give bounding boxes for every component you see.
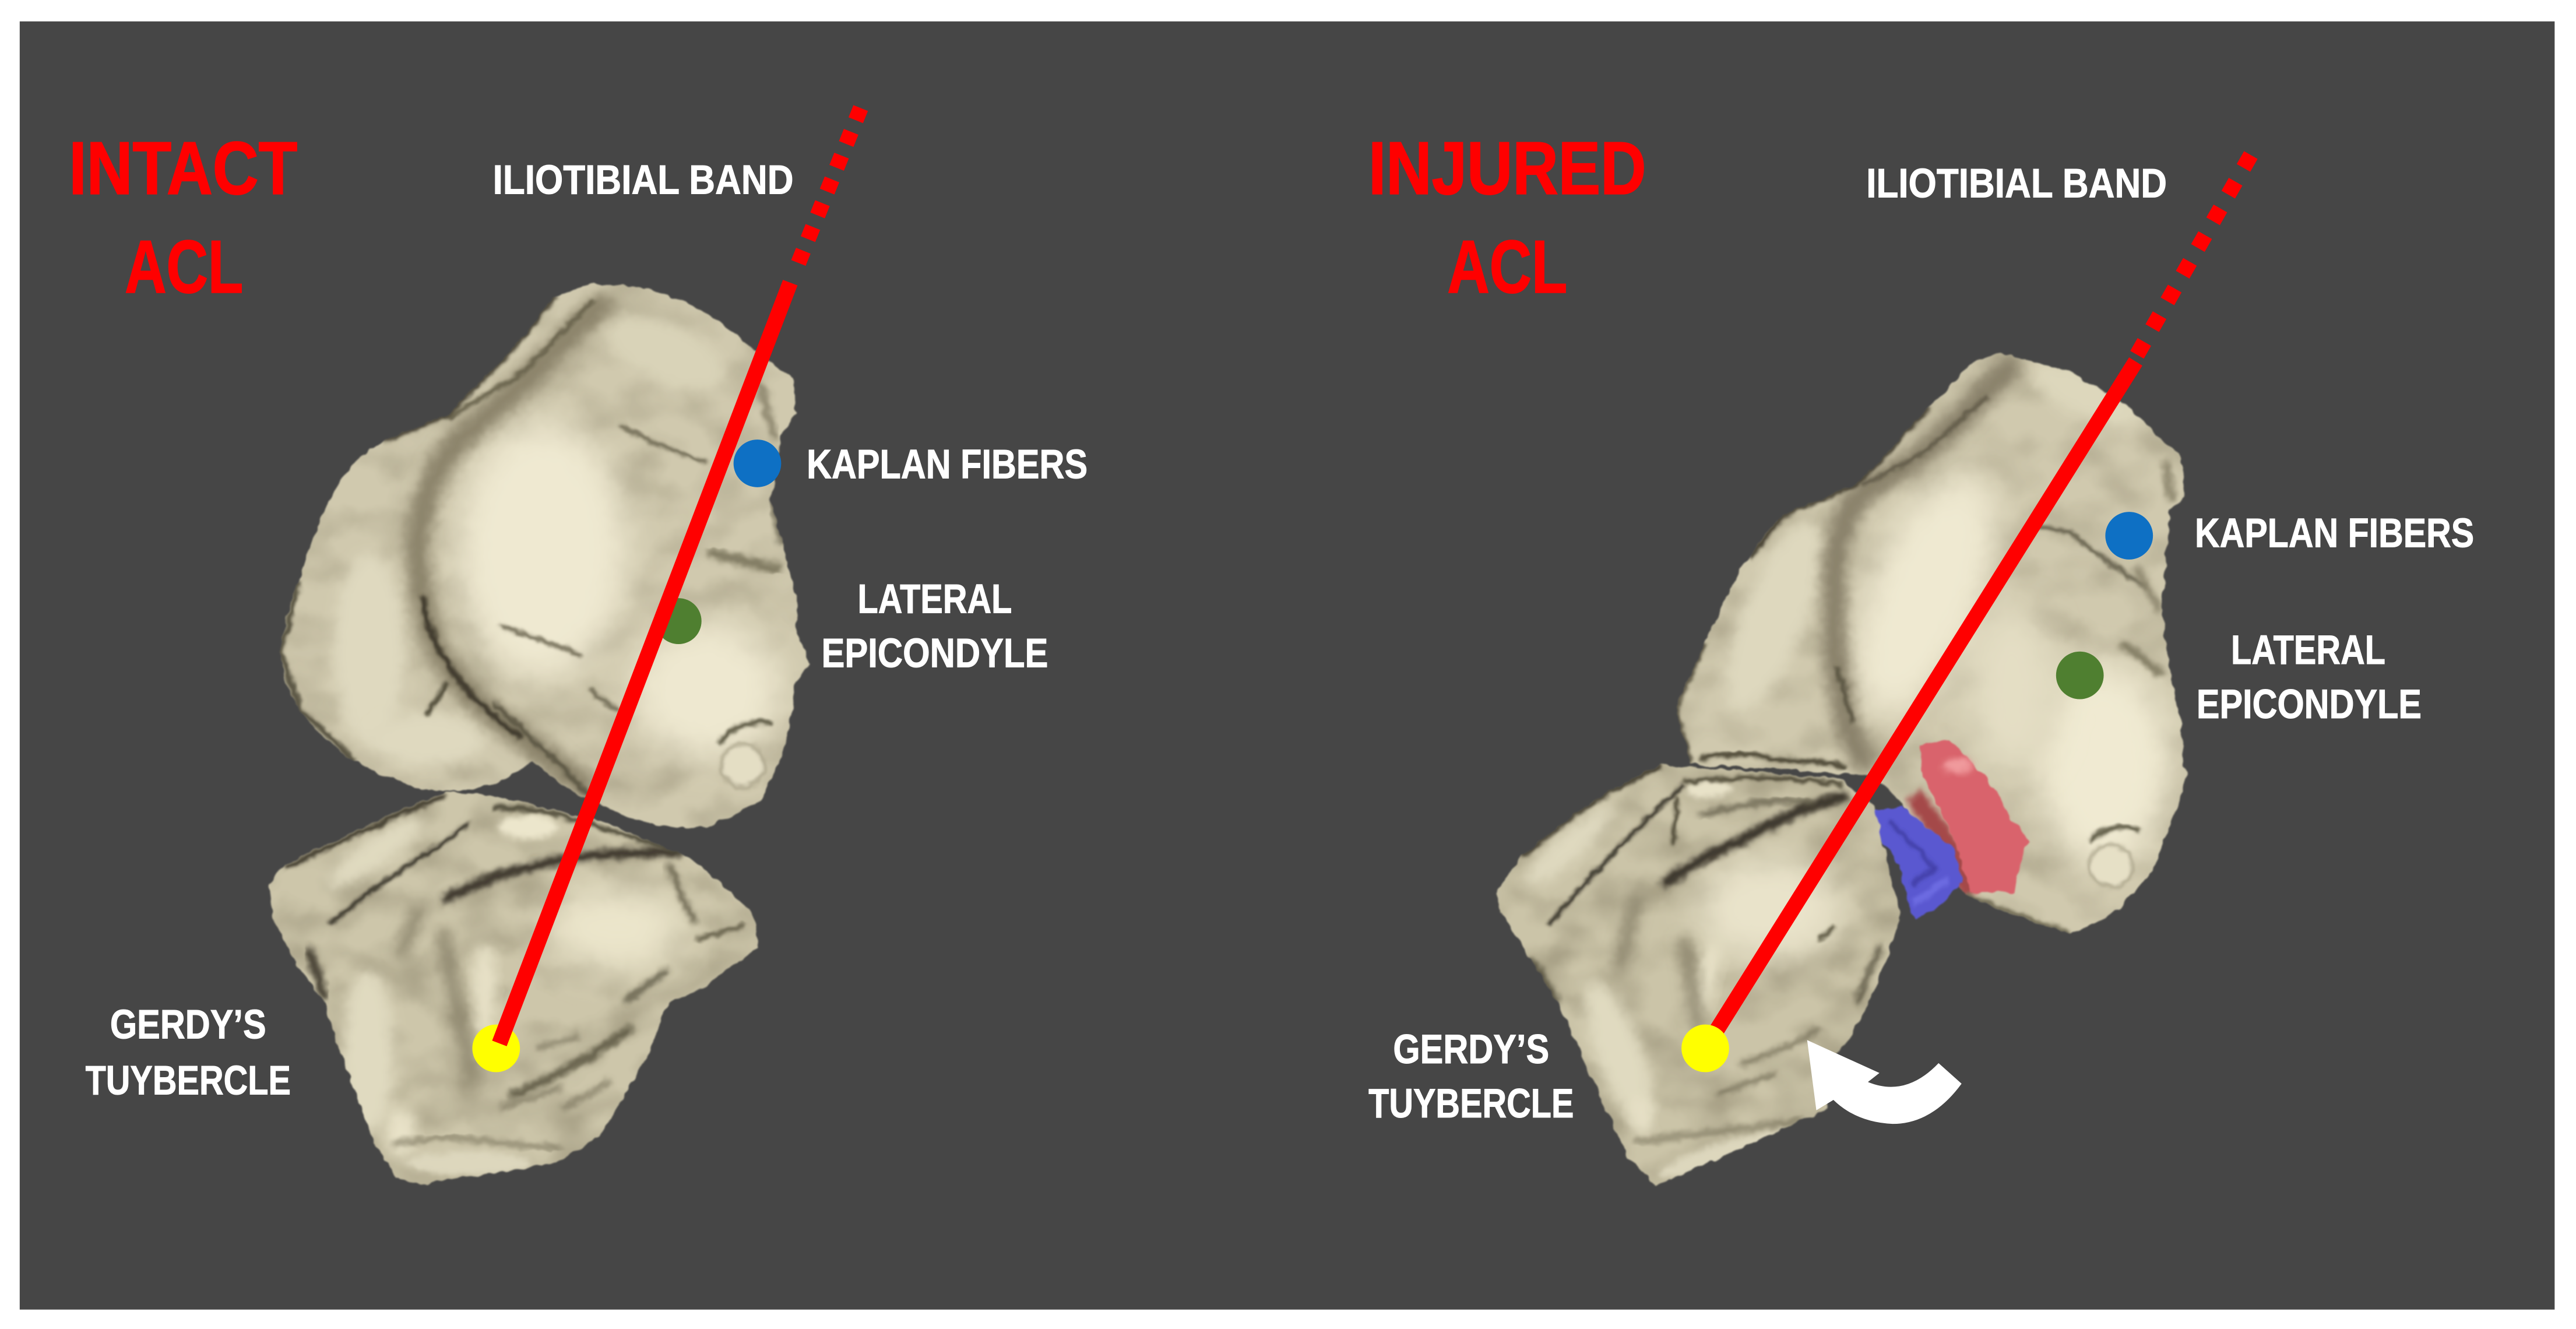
- label: iliotibial band: ILIOTIBIAL BAND: [493, 157, 794, 203]
- panel: intact ACL: [69, 108, 1088, 1196]
- label: lateral epicondyle: LATERAL: [2231, 627, 2385, 673]
- label: lateral epicondyle: EPICONDYLE: [2197, 681, 2422, 727]
- marker: lateral epicondyle: [656, 598, 702, 644]
- knee model: intact tibia: [263, 785, 772, 1196]
- label: Gerdy's tubercle: TUYBERCLE: [86, 1057, 291, 1103]
- torn ACL: tibial remnant: [1873, 807, 1962, 920]
- iliotibial band solid line: [499, 283, 790, 1043]
- heading: intact ACL: [69, 127, 297, 309]
- label: Gerdy's tubercle: [1368, 1026, 1574, 1126]
- arrow: tibial rotation: [1807, 1040, 1962, 1124]
- label: lateral epicondyle: [2197, 627, 2422, 727]
- label: Gerdy's tubercle: TUYBERCLE: [1368, 1080, 1574, 1126]
- label: lateral epicondyle: EPICONDYLE: [821, 630, 1048, 676]
- marker: Gerdy's tubercle: [472, 1025, 520, 1072]
- marker: lateral epicondyle: [2056, 652, 2104, 699]
- label: Kaplan fibers: KAPLAN FIBERS: [2195, 510, 2474, 556]
- iliotibial band dotted line: [798, 108, 861, 263]
- knee model: injured femur: [1676, 352, 2189, 934]
- torn ACL: femoral remnant: [1920, 740, 2029, 892]
- heading: injured ACL: INJURED: [1368, 127, 1646, 210]
- marker: Gerdy's tubercle: [1681, 1025, 1729, 1072]
- label: iliotibial band: ILIOTIBIAL BAND: [1866, 160, 2167, 206]
- label: lateral epicondyle: [821, 575, 1048, 676]
- label: Gerdy's tubercle: [86, 1001, 291, 1103]
- knee model: injured tibia: [1495, 762, 1901, 1187]
- label: lateral epicondyle: LATERAL: [857, 575, 1012, 621]
- marker: Kaplan fibers: [734, 440, 781, 487]
- label: Kaplan fibers: KAPLAN FIBERS: [807, 441, 1088, 487]
- heading: intact ACL: ACL: [125, 226, 243, 309]
- heading: intact ACL: INTACT: [69, 127, 297, 210]
- heading: injured ACL: [1368, 127, 1646, 309]
- heading: injured ACL: ACL: [1447, 226, 1567, 309]
- iliotibial band dotted line: [2137, 154, 2251, 355]
- iliotibial band solid line: [1705, 361, 2136, 1048]
- label: Gerdy's tubercle: GERDY’S: [1393, 1026, 1549, 1072]
- marker: Kaplan fibers: [2105, 512, 2153, 560]
- knee model: intact femur: [263, 263, 821, 838]
- panel: injured ACL: [1368, 127, 2474, 1200]
- label: Gerdy's tubercle: GERDY’S: [110, 1001, 266, 1047]
